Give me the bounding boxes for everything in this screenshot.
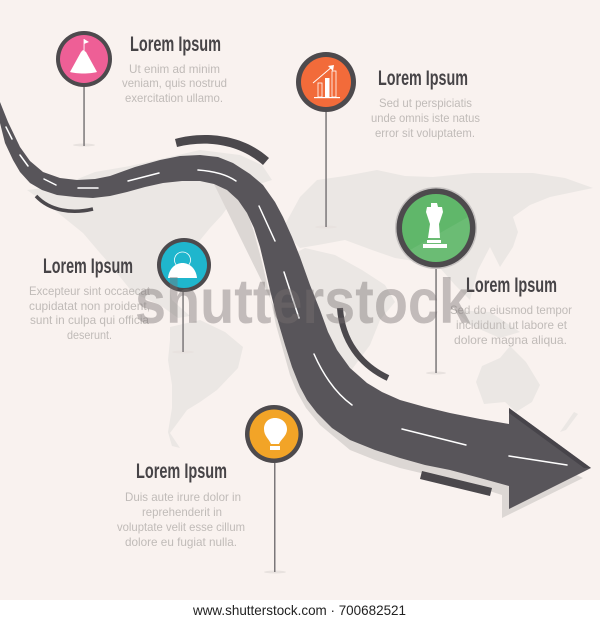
road arrow facet	[509, 408, 591, 468]
icon: light bulb	[264, 418, 287, 450]
text block 3: Excepteur sint occaecat	[29, 284, 151, 298]
text block 1: Lorem Ipsum	[130, 33, 221, 56]
text block 2	[371, 67, 480, 140]
text block 1: exercitation ullamo.	[125, 91, 223, 105]
text block 4: dolore magna aliqua.	[454, 333, 567, 347]
right road fragment	[340, 308, 388, 378]
watermark: shutterstock	[135, 267, 471, 337]
text block 2: Sed ut perspiciatis	[379, 96, 472, 110]
text block 3: Lorem Ipsum	[43, 255, 133, 278]
text block 3: sunt in culpa qui officia	[30, 313, 149, 327]
footer strip	[0, 600, 600, 620]
road shadow	[212, 180, 583, 518]
world map	[27, 150, 593, 448]
road with arrow	[0, 102, 591, 518]
text block 3: deserunt.	[67, 328, 112, 342]
text block 2: error sit voluptatem.	[375, 126, 475, 140]
text block 1	[122, 33, 227, 105]
icon: mountain with flag	[70, 39, 97, 74]
pin 2: growth chart	[296, 52, 356, 228]
pin 1: mountain	[56, 31, 112, 146]
text block 5: voluptate velit esse cillum	[117, 520, 245, 534]
text block 2: unde omnis iste natus	[371, 111, 480, 125]
text block 4: incididunt ut labore et	[456, 318, 568, 332]
text block 4: Lorem Ipsum	[466, 274, 557, 297]
text block 5: Duis aute irure dolor in	[125, 490, 241, 504]
bottom road fragment	[420, 471, 492, 496]
text block 5: reprehenderit in	[142, 505, 222, 519]
text block 5	[117, 460, 245, 549]
green highlight facet	[410, 217, 470, 262]
text block 1: veniam, quis nostrud	[122, 76, 227, 90]
icon: chess king	[423, 203, 447, 248]
text block 5: Lorem Ipsum	[136, 460, 227, 483]
lane dashes	[6, 127, 567, 465]
text block 1: Ut enim ad minim	[129, 62, 220, 76]
text block 2: Lorem Ipsum	[378, 67, 468, 90]
road surface	[0, 102, 591, 509]
text block 3	[29, 255, 151, 342]
top road fragment	[175, 135, 269, 165]
icon: bar chart with arrow	[313, 65, 340, 98]
pin 3: chess piece	[395, 187, 477, 374]
text block 3: cupidatat non proident,	[29, 299, 150, 313]
footer strip: www.shutterstock.com · 700682521	[192, 602, 406, 618]
icon: bell	[168, 252, 197, 278]
text block 4: Sed do eiusmod tempor	[450, 303, 572, 317]
lower left road fragment	[36, 196, 93, 211]
pin 4: service bell	[157, 238, 211, 354]
text block 4	[450, 274, 572, 347]
pin 5: light bulb	[245, 405, 303, 574]
text block 5: dolore eu fugiat nulla.	[125, 535, 237, 549]
